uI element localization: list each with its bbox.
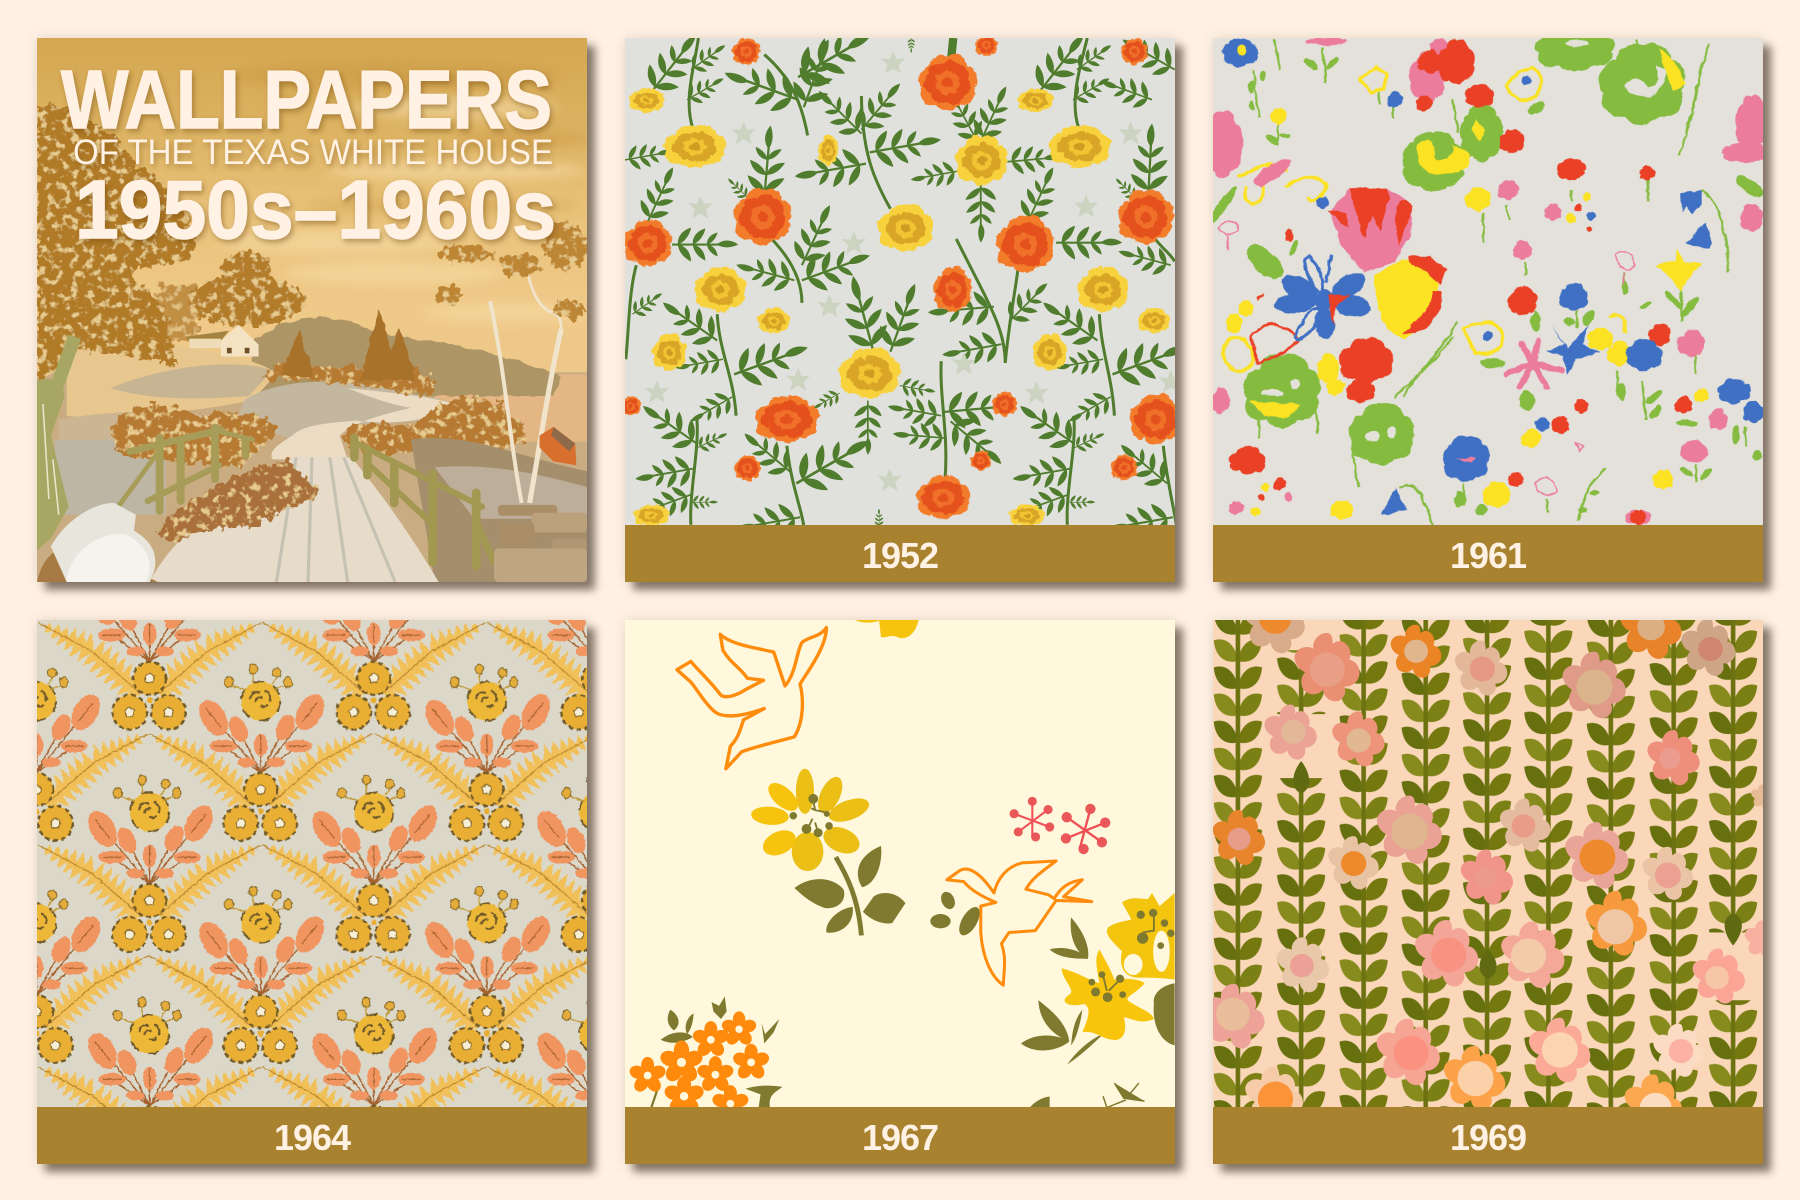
- orange blossom cluster with leaves: [628, 996, 782, 1123]
- far tree line and centre tree: [158, 253, 305, 341]
- panel: 1969 retro flower columns wallpaper: [1213, 620, 1763, 1164]
- small olive leaves near bird: [930, 890, 984, 939]
- ground base: [37, 372, 587, 582]
- year label 1952: [625, 525, 1175, 582]
- pink blooms: [1202, 37, 1770, 525]
- left bridge fence: [118, 428, 253, 511]
- leafy sprigs: [623, 14, 1194, 548]
- large green blooms: [1243, 26, 1685, 465]
- left tree foliage: [37, 105, 195, 388]
- foreground rocks: [37, 503, 158, 582]
- main road and middle ground: [237, 382, 452, 459]
- birch trees: [490, 273, 561, 503]
- farmhouse: [185, 325, 259, 356]
- coral starbursts: [1010, 797, 1116, 859]
- blue daisy: [1274, 254, 1372, 343]
- title text: [60, 53, 558, 256]
- yellow accents: [1226, 47, 1709, 519]
- year label 1964: [37, 1107, 587, 1164]
- blue flowers: [1222, 38, 1765, 515]
- red blooms: [1229, 39, 1692, 525]
- stone wall: [494, 505, 587, 582]
- lower right field: [411, 438, 587, 582]
- pale stars: [645, 51, 1183, 491]
- pink outline blossoms: [1219, 221, 1635, 495]
- red barn: [540, 427, 576, 465]
- year label 1967: [625, 1107, 1175, 1164]
- painted blooms: [1202, 26, 1770, 525]
- panel: title card with landscape mural: [37, 38, 587, 582]
- panel: 1967 birds and flowers wallpaper: [625, 620, 1175, 1164]
- bud tips: [1293, 761, 1742, 979]
- right bridge fence: [354, 438, 494, 566]
- green stems: [1253, 40, 1746, 525]
- year label 1964: 1964: [274, 1117, 350, 1158]
- title text: 1950s–1960s: [75, 163, 556, 256]
- bridge deck: [150, 457, 439, 582]
- year label 1969: 1969: [1450, 1117, 1526, 1158]
- year label 1967: 1967: [862, 1117, 938, 1158]
- yellow lilies lower right: [1021, 893, 1175, 1108]
- yellow sunflower with olive leaves: [750, 769, 905, 935]
- distant hills: [253, 317, 561, 396]
- panel: 1964 fern and rose damask wallpaper: [37, 620, 587, 1164]
- flower centres: [1237, 45, 1531, 463]
- left tree trunk: [37, 337, 75, 550]
- pink daisy: [1506, 340, 1562, 387]
- orange bird left: [677, 628, 826, 769]
- panel: 1961 bright floral wallpaper: [1213, 38, 1763, 582]
- pine trees: [282, 309, 417, 380]
- snowy meadow: [55, 341, 276, 515]
- year label 1969: [1213, 1107, 1763, 1164]
- green stems: [626, 38, 1177, 527]
- panel: 1952 marigold wallpaper: [625, 38, 1175, 582]
- yellow marigolds: [629, 89, 1170, 526]
- shrubs, pines and mid-ground foliage: [110, 361, 526, 467]
- repeating fern, leaf and rose motifs: [0, 442, 718, 1174]
- orange marigolds: [620, 33, 1184, 521]
- sky: [37, 38, 593, 582]
- leafy vine columns: [1213, 601, 1758, 1143]
- tree shadow on bridge: [158, 459, 320, 542]
- birch foliage: [435, 222, 587, 319]
- yellow tulip: [1374, 256, 1447, 339]
- gaps inside green blooms: [1261, 40, 1667, 442]
- retro flowers: [1203, 589, 1781, 1135]
- title text: OF THE TEXAS WHITE HOUSE: [73, 133, 553, 172]
- yellow outline flowers: [1223, 68, 1626, 371]
- year label 1961: 1961: [1450, 535, 1526, 576]
- top yellow flower fragment: [855, 620, 919, 638]
- year label 1952: 1952: [862, 535, 938, 576]
- orange bird right: [947, 861, 1092, 985]
- year label 1961: [1213, 525, 1763, 582]
- green leaves: [1205, 55, 1767, 515]
